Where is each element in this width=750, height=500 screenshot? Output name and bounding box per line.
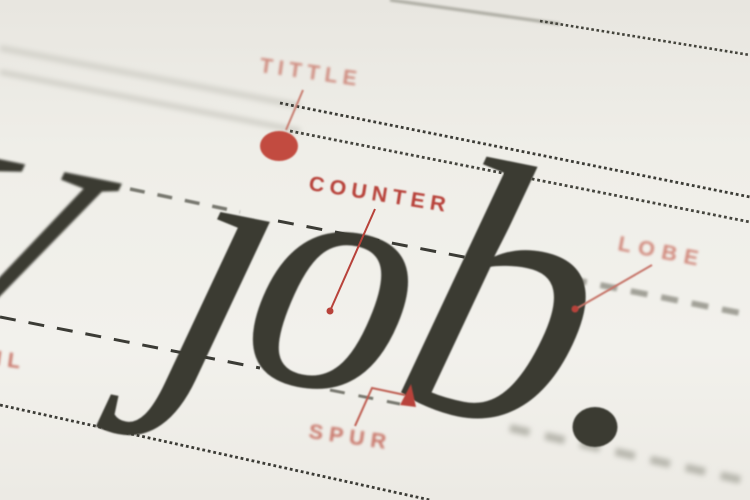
label: spur: [307, 384, 416, 455]
label: lobe: LOBE: [616, 231, 708, 272]
label: spur: SPUR: [307, 419, 394, 455]
letter o: o: [191, 86, 498, 469]
word: job: [93, 65, 691, 500]
label: tittle: TITTLE: [258, 54, 363, 91]
label: counter: COUNTER: [307, 171, 453, 217]
label: tittle: [258, 54, 363, 161]
guide lines: dashed x-height and baseline: [0, 189, 750, 482]
label: lobe: [572, 231, 708, 312]
period: [572, 407, 618, 447]
letter b: b: [339, 89, 691, 500]
letter j (dotless): ȷ: [93, 65, 367, 452]
label: counter: [307, 171, 453, 314]
